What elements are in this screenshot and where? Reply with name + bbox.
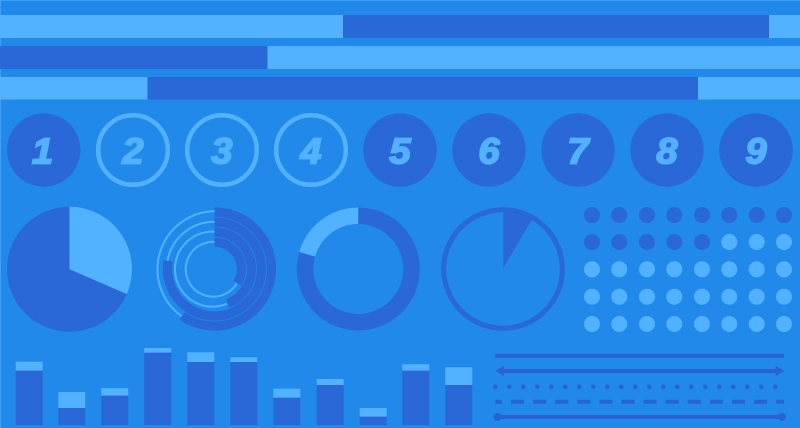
horizontal bar 3: [0, 77, 800, 100]
donut chart: [305, 216, 411, 322]
pie chart: [7, 207, 132, 332]
number badge 3: [187, 115, 257, 185]
number badge 7: 7: [567, 131, 591, 171]
number badge 5: 5: [389, 131, 412, 171]
panel: line styles: [494, 356, 786, 421]
number badge 8: [630, 113, 704, 187]
horizontal bar 2: [0, 46, 800, 69]
number badge 9: 9: [745, 131, 767, 171]
number badge 5: [363, 113, 437, 187]
number badge 9: [719, 113, 793, 187]
dotted line: [495, 384, 776, 389]
number badge 1: 1: [32, 131, 53, 171]
number badge 3: 3: [211, 131, 233, 171]
gauge ring with wedge: [444, 209, 562, 328]
number badge 4: 4: [299, 131, 322, 171]
panel: stacked horizontal bars: [0, 15, 800, 100]
line with round end caps: [494, 413, 786, 421]
solid line: [495, 354, 784, 358]
number badge 7: [541, 113, 615, 187]
horizontal bar 1: [0, 15, 800, 38]
dot matrix: [584, 207, 792, 332]
double-headed arrow: [495, 366, 784, 376]
number badge 4: [276, 115, 346, 185]
panel: numbered circles: [7, 113, 793, 187]
number badge 1: [7, 113, 80, 187]
radial bar chart: [157, 211, 271, 326]
number badge 2: 2: [121, 131, 144, 171]
number badge 8: 8: [656, 131, 678, 171]
dashed line: [495, 400, 784, 404]
number badge 2: [98, 115, 168, 185]
number badge 6: 6: [478, 131, 500, 171]
number badge 6: [452, 113, 526, 187]
bar chart: [16, 348, 472, 425]
